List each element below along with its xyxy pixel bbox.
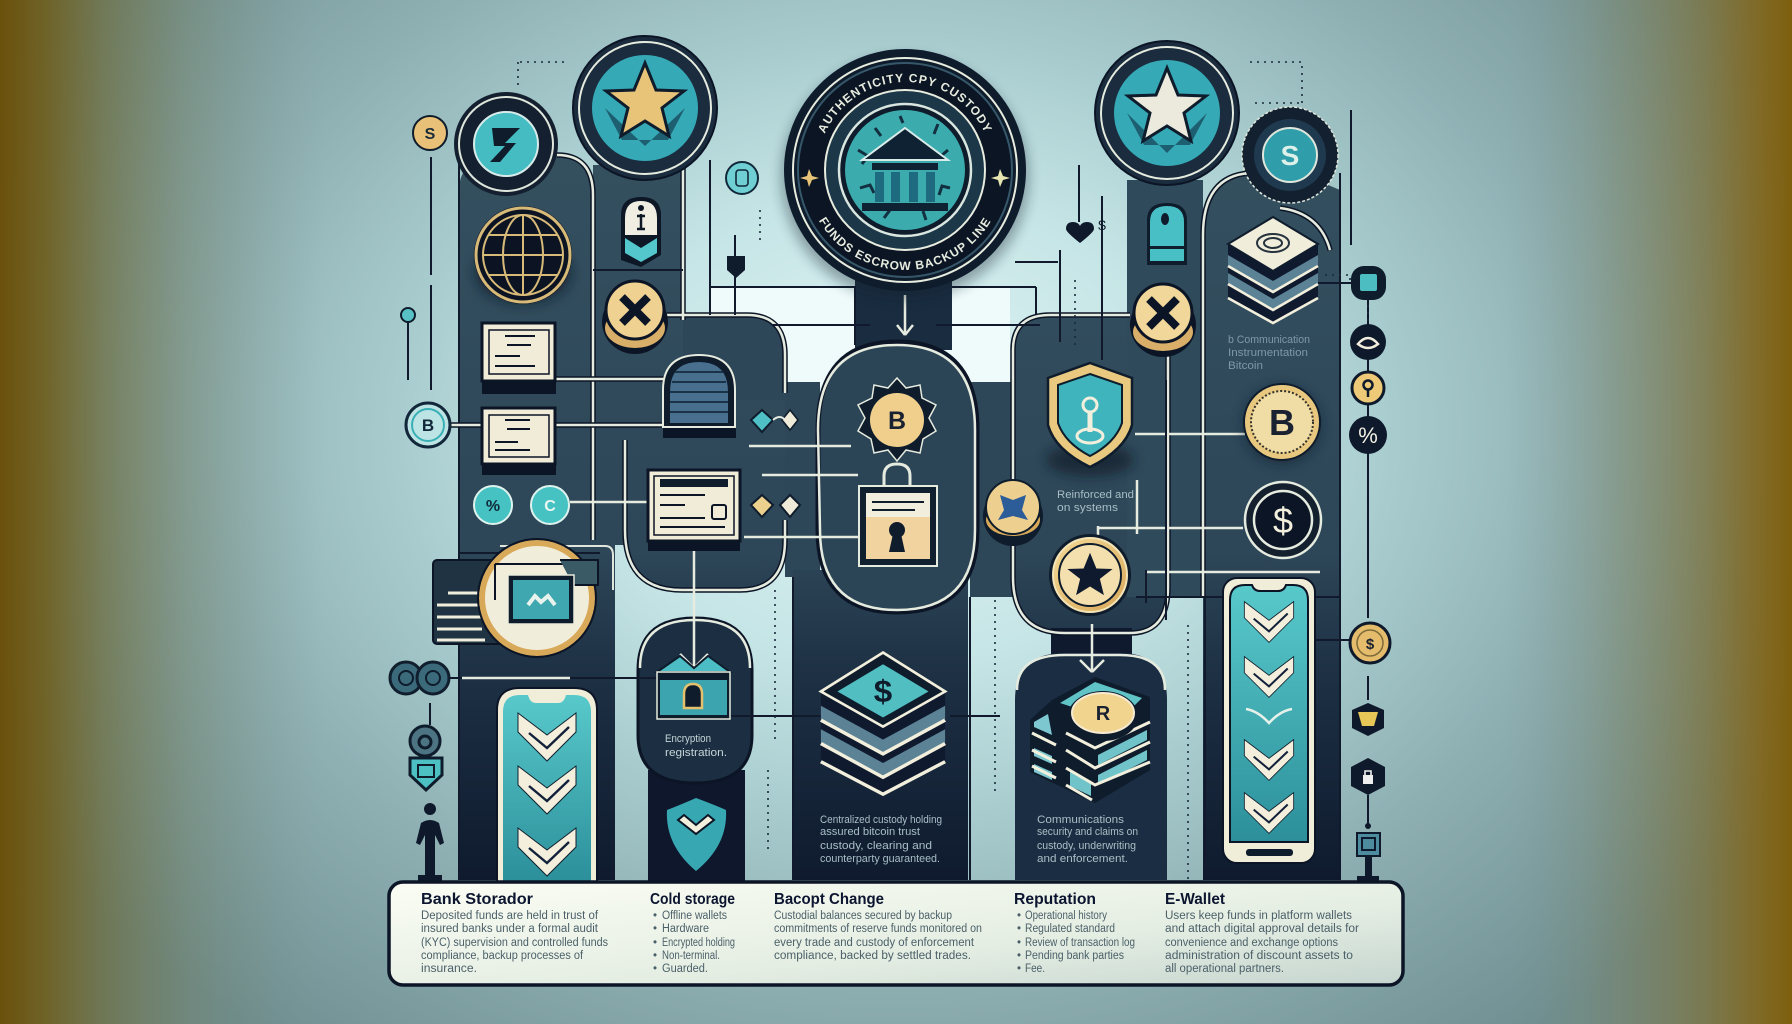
label: shield note: Reinforced and — [1057, 489, 1134, 501]
block: cold storage: Non-terminal. — [662, 950, 720, 962]
block: bank storage: Deposited funds are held in trust of — [421, 910, 599, 922]
icon: B circle — [406, 403, 450, 447]
icon: check b — [1244, 657, 1294, 697]
block: bank storage: (KYC) supervision and controlled funds — [421, 937, 608, 949]
icon: percent badge: % — [1358, 423, 1378, 448]
icon: check d — [1244, 740, 1294, 780]
icon: diamonds gold — [751, 495, 800, 517]
panel: right column — [1203, 173, 1340, 880]
block: backup exchange: Bacopt Change — [774, 891, 884, 908]
panel: structural dark columns — [459, 155, 1340, 882]
block: reputation: • — [1017, 910, 1021, 922]
block: reputation: • — [1017, 950, 1021, 962]
block: bank storage — [421, 891, 608, 975]
icon: seal star left — [800, 169, 819, 187]
panel: cold storage pill — [638, 618, 752, 783]
block: reputation: • — [1017, 963, 1021, 975]
block: e-wallet: convenience and exchange options — [1165, 937, 1338, 949]
block: cold storage: Encrypted holding — [662, 937, 735, 949]
block: backup exchange — [774, 891, 982, 962]
label: centre column note: Centralized custody holding — [820, 814, 942, 826]
label: centre column note: assured bitcoin trust — [820, 826, 920, 838]
icon: bank — [862, 128, 948, 211]
icon: document one — [482, 323, 556, 394]
label: centre column note — [820, 814, 942, 865]
block: cold storage: Cold storage — [650, 891, 735, 908]
phone: left checklist — [497, 688, 597, 882]
block: reputation: Review of transaction log — [1025, 937, 1135, 949]
icon: check three — [518, 828, 576, 876]
icon: centre money stack: $ — [874, 674, 892, 709]
block: cold storage: • — [653, 923, 657, 935]
icon: lock badge and teal tile — [410, 703, 442, 790]
panel: reputation neck — [1051, 628, 1132, 658]
panel: cold base — [648, 770, 745, 882]
block: e-wallet — [1165, 891, 1359, 975]
panel: lighter window behind connectors — [710, 287, 1010, 387]
block: reputation — [1014, 891, 1135, 975]
block: cold storage: • — [653, 963, 657, 975]
block: bank storage: insurance. — [421, 963, 477, 975]
icon: lock document — [859, 464, 937, 566]
icon: small gold coin: S — [425, 126, 436, 143]
phone: right checklist — [1223, 578, 1315, 863]
label: reputation note: custody, underwriting — [1037, 840, 1136, 852]
icon: eye badge — [1350, 324, 1386, 360]
icon: blue gold coin — [983, 480, 1043, 546]
icon: check c — [1246, 709, 1292, 723]
icon: document two — [482, 408, 556, 475]
icon: gold key coin — [1352, 372, 1384, 404]
icon: paired coins — [390, 662, 449, 694]
icon: small dark shield — [727, 256, 745, 278]
label: cold pill note: registration. — [665, 747, 727, 759]
icon: bitcoin burst badge — [858, 378, 936, 461]
label: centre column note: custody, clearing and — [820, 840, 932, 852]
label: shield note — [1057, 489, 1134, 514]
icon: bitcoin burst badge: B — [888, 407, 906, 435]
icon: gold X coin right — [1130, 284, 1196, 357]
label: reputation note: Communications — [1037, 814, 1125, 826]
block: e-wallet: all operational partners. — [1165, 963, 1284, 975]
icon: check two — [518, 766, 576, 814]
block: reputation: Pending bank parties — [1025, 950, 1124, 962]
icon: globe — [474, 206, 572, 304]
block: reputation: Regulated standard — [1025, 923, 1115, 935]
seal text: bottom arc: FUNDS ESCROW BACKUP LINE — [819, 216, 990, 270]
block: reputation: Reputation — [1014, 891, 1096, 908]
block: cold storage: • — [653, 910, 657, 922]
icon: check a — [1244, 602, 1294, 642]
label: shield note: on systems — [1057, 502, 1119, 514]
label: reputation note: and enforcement. — [1037, 853, 1128, 865]
panel: star column left — [593, 165, 683, 545]
label: cold pill note — [665, 733, 727, 759]
icon: teal shield — [667, 798, 726, 871]
label: reputation note — [1037, 814, 1138, 865]
block: backup exchange: compliance, backed by settled trades. — [774, 950, 971, 962]
icon: hex gold — [1352, 703, 1384, 736]
block: backup exchange: Custodial balances secured by backup — [774, 910, 952, 922]
icon: S gear badge: S — [1281, 140, 1299, 171]
panel: seal neck — [855, 275, 952, 350]
label: right column note: Instrumentation — [1228, 347, 1308, 359]
icon: percent badge — [1349, 416, 1387, 454]
icon: kiosk — [1357, 823, 1380, 881]
block: backup exchange: commitments of reserve funds monitored on — [774, 923, 982, 935]
icon: document three — [648, 470, 740, 551]
icon: left small S badge — [454, 92, 558, 196]
label: reputation note: security and claims on — [1037, 826, 1138, 838]
icon: B circle: B — [422, 416, 434, 435]
icon: reputation cash and coin stack — [1030, 677, 1150, 803]
icon: teal coin — [531, 486, 569, 524]
icon: teal tag — [1147, 203, 1187, 265]
icon: dollar circle: $ — [1273, 500, 1293, 541]
icon: gold X coin left — [602, 281, 668, 354]
icon: tile badge — [1351, 266, 1386, 300]
block: e-wallet: and attach digital approval details for — [1165, 923, 1359, 935]
label: right column note: Bitcoin — [1228, 360, 1263, 372]
block: reputation: • — [1017, 923, 1021, 935]
icon: hex lock — [1351, 758, 1385, 795]
icon: dollar circle — [1245, 482, 1321, 558]
icon: person — [416, 803, 444, 881]
block: cold storage: Hardware — [662, 923, 709, 935]
label: right column note — [1228, 334, 1310, 372]
seal text: top arc: AUTHENTICITY CPY CUSTODY — [818, 74, 992, 134]
icon: bitcoin coin — [1243, 384, 1321, 464]
icon: card with gold coin — [433, 539, 613, 657]
label: centre column note: counterparty guaranteed. — [820, 853, 940, 865]
icon: check one — [518, 713, 576, 761]
panel: star column right — [1127, 180, 1203, 597]
seal: authenticity custody — [774, 49, 1036, 308]
icon: gold coin — [1350, 623, 1390, 663]
icon: reputation cash and coin stack: R — [1096, 703, 1111, 725]
icon: star coin — [1049, 534, 1131, 616]
block: e-wallet: administration of discount assets to — [1165, 950, 1353, 962]
icon: S gear badge — [1242, 107, 1338, 203]
icon: gold coin: $ — [1366, 636, 1375, 653]
icon: vault dome — [663, 355, 736, 438]
icon: bitcoin coin: B — [1269, 402, 1295, 443]
block: reputation: Operational history — [1025, 910, 1107, 922]
block: reputation: Fee. — [1025, 963, 1045, 975]
icon: right money stack — [1228, 217, 1318, 323]
block: bank storage: Bank Storador — [421, 891, 533, 908]
icon: teal coin: C — [544, 498, 556, 515]
block: cold storage: • — [653, 937, 657, 949]
icon: percent circle: % — [486, 498, 500, 515]
block: cold storage: Guarded. — [662, 963, 708, 975]
block: bank storage: insured banks under a formal audit — [421, 923, 599, 935]
block: backup exchange: every trade and custody of enforcement — [774, 937, 975, 949]
icon: left star badge — [573, 36, 717, 180]
block: cold storage — [650, 891, 735, 975]
block: e-wallet: Users keep funds in platform wallets — [1165, 910, 1352, 922]
panel: reputation arch — [1015, 653, 1167, 880]
panel: connector block centre right — [970, 382, 1030, 597]
icon: heart — [1066, 217, 1106, 243]
icon: centre money stack — [821, 652, 945, 794]
block: e-wallet: E-Wallet — [1165, 891, 1226, 908]
label: right column note: b Communication — [1228, 334, 1310, 346]
icon: seal star right — [991, 169, 1010, 187]
panel: centre column — [793, 570, 968, 880]
icon: heart: $ — [1098, 217, 1106, 233]
icon: diamonds teal — [751, 410, 798, 432]
panel: bubble left — [625, 400, 785, 590]
label: cold pill note: Encryption — [665, 733, 711, 745]
block: cold storage: Offline wallets — [662, 910, 727, 922]
block: cold storage: • — [653, 950, 657, 962]
icon: shield — [1046, 363, 1134, 476]
right rail icons — [1349, 266, 1390, 881]
icon: info tag — [621, 197, 661, 267]
icon: teal pin — [401, 308, 415, 322]
icon: check e — [1244, 793, 1294, 833]
icon: percent circle — [474, 486, 512, 524]
block: reputation: • — [1017, 937, 1021, 949]
icon: right star badge — [1095, 41, 1239, 185]
block: bank storage: compliance, backup processes of — [421, 950, 584, 962]
panel: legend — [389, 882, 1403, 985]
icon: cold storage lock — [657, 656, 730, 719]
panel: left column — [459, 155, 615, 880]
connector lines — [405, 62, 1368, 880]
icon: small gold coin — [413, 116, 447, 150]
icon: small teal circle — [726, 162, 758, 194]
panel: connector block left — [683, 315, 820, 577]
panel: centre arch — [818, 342, 977, 612]
panel: bubble right — [1013, 315, 1168, 633]
